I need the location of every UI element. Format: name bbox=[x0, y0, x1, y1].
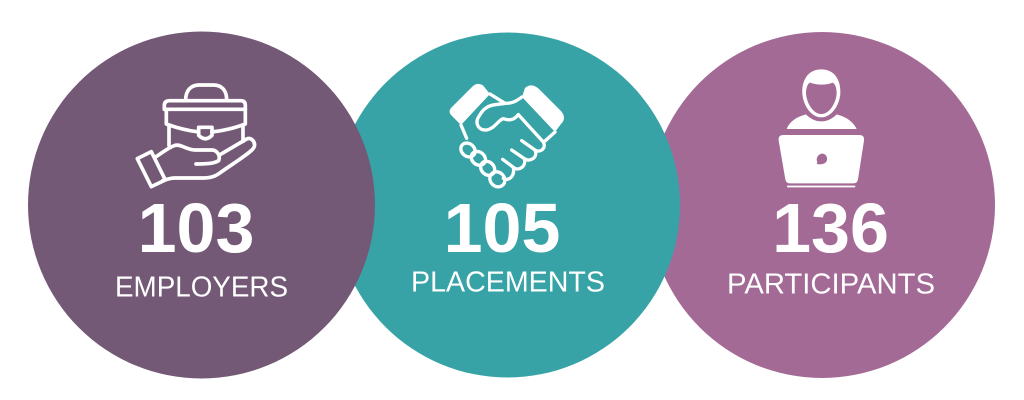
laptop bbox=[779, 135, 864, 183]
circle: employers background bbox=[28, 32, 375, 378]
circle: participants background bbox=[649, 32, 995, 378]
right cuff bbox=[522, 85, 564, 132]
label: participants: PARTICIPANTS bbox=[727, 268, 935, 300]
left cuff bbox=[450, 84, 490, 125]
laptop base bbox=[787, 186, 855, 187]
label: employers: EMPLOYERS bbox=[115, 272, 288, 304]
shoulders bbox=[787, 114, 857, 129]
number: 136: 136 bbox=[772, 189, 889, 267]
number: 105: 105 bbox=[444, 189, 560, 267]
head outline bbox=[802, 69, 840, 117]
icon: briefcase on open hand bbox=[137, 85, 254, 187]
icon: person at laptop bbox=[779, 69, 864, 187]
icon: handshake bbox=[450, 84, 564, 190]
number: 103: 103 bbox=[138, 189, 254, 267]
label: placements: PLACEMENTS bbox=[411, 266, 605, 298]
circle: placements background bbox=[335, 32, 680, 378]
